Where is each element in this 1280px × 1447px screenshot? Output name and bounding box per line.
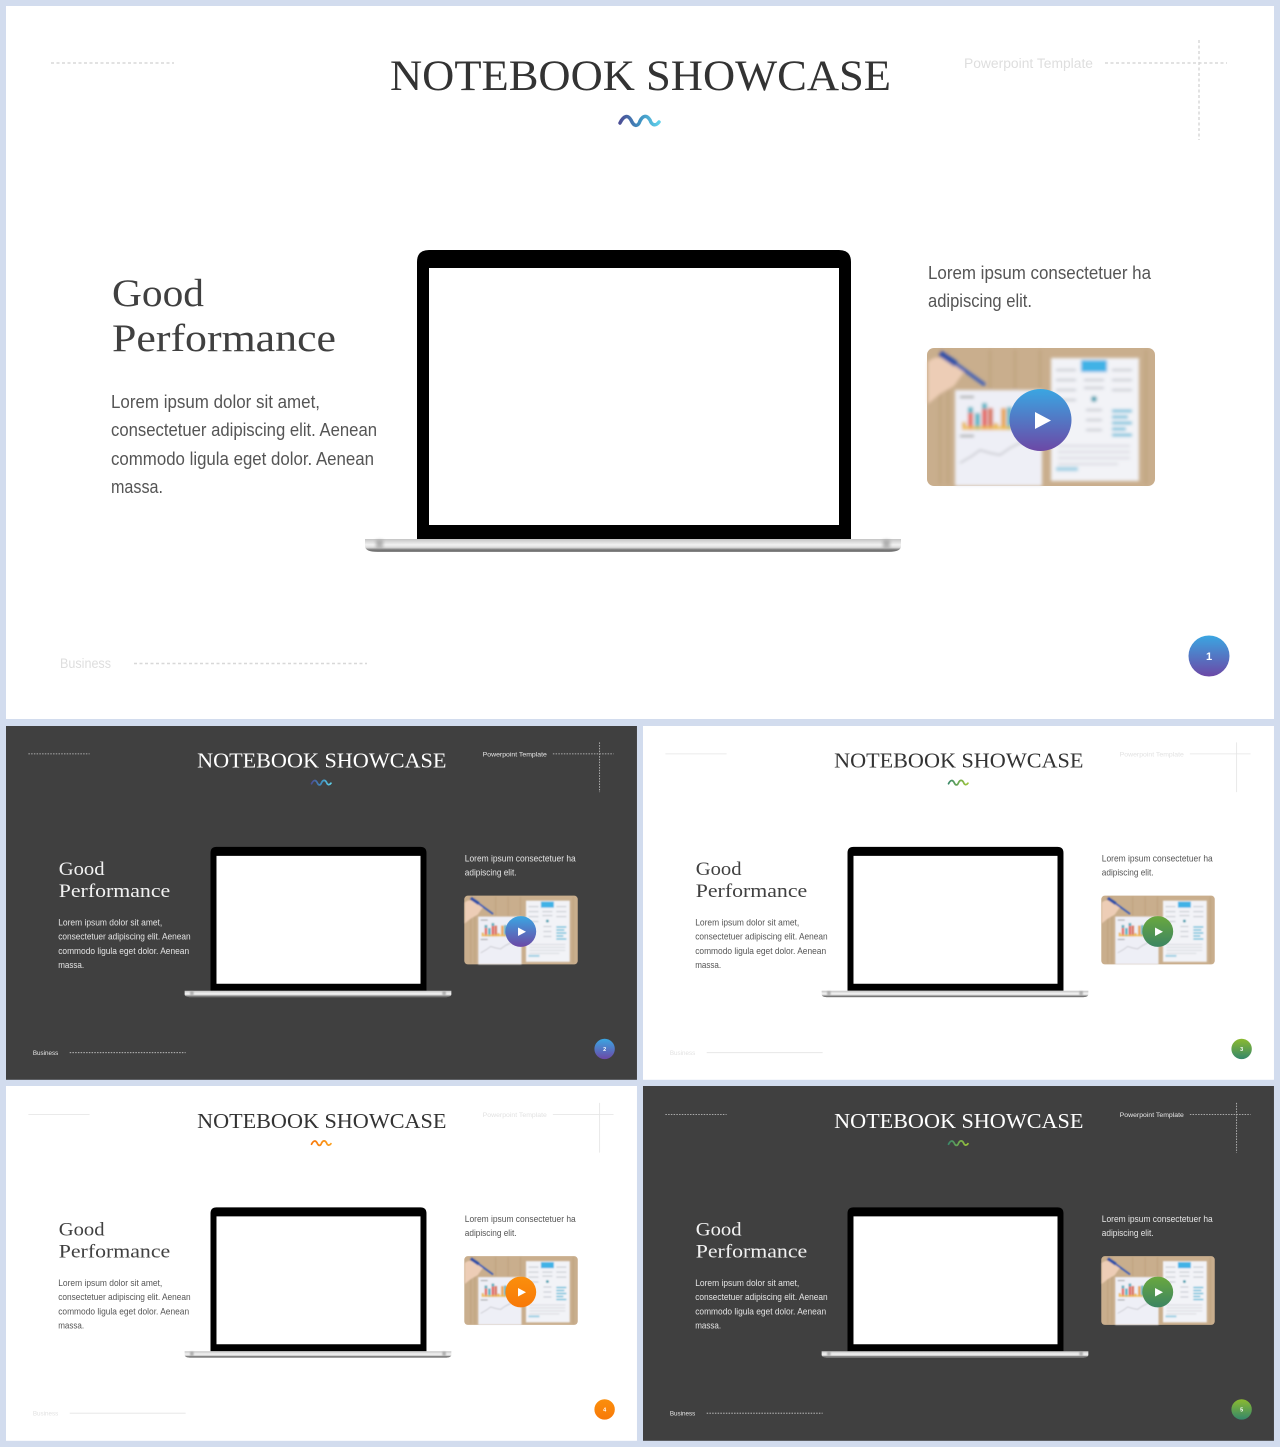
- title: NOTEBOOK SHOWCASE: [834, 748, 1083, 772]
- heading: Performance: Performance: [59, 881, 170, 902]
- footer label: Business: [33, 1410, 59, 1417]
- laptop: [185, 1207, 451, 1358]
- page number badge: 4: [603, 1407, 607, 1413]
- wave ornament: [949, 1141, 968, 1145]
- body text: consectetuer adipiscing elit. Aenean: [58, 1292, 191, 1302]
- heading: Performance: Performance: [696, 1242, 807, 1263]
- header crosshair rules: [553, 1103, 614, 1153]
- panel: slide 5 dark green: [643, 1086, 1274, 1441]
- body text: consectetuer adipiscing elit. Aenean: [111, 420, 377, 440]
- header left dashed rule: [28, 1113, 90, 1115]
- header label: Powerpoint Template: [964, 56, 1093, 71]
- body text: Lorem ipsum dolor sit amet,: [58, 1278, 162, 1288]
- wave ornament: [949, 780, 968, 785]
- play button: [1142, 916, 1173, 947]
- footer label: Business: [670, 1050, 696, 1057]
- page number badge: [1231, 1399, 1252, 1420]
- title: NOTEBOOK SHOWCASE: [390, 53, 891, 100]
- panel: slide 3 white green: [643, 726, 1274, 1080]
- side text: Lorem ipsum consectetuer ha: [465, 1214, 576, 1224]
- footer label: Business: [670, 1410, 696, 1417]
- header label: Powerpoint Template: [483, 751, 547, 758]
- page number badge: [594, 1039, 615, 1059]
- header crosshair rules: [1190, 742, 1251, 792]
- body text: commodo ligula eget dolor. Aenean: [695, 946, 826, 956]
- panel: slide 1 large white: [6, 6, 1274, 719]
- body text: commodo ligula eget dolor. Aenean: [695, 1306, 826, 1316]
- video thumbnail: [464, 896, 578, 964]
- heading: Performance: Performance: [696, 881, 807, 902]
- footer label: Business: [60, 656, 111, 671]
- body text: massa.: [695, 960, 721, 970]
- body text: commodo ligula eget dolor. Aenean: [111, 449, 374, 469]
- header label: Powerpoint Template: [1120, 1112, 1184, 1119]
- video thumbnail: [464, 1256, 578, 1325]
- page number badge: 3: [1240, 1047, 1243, 1053]
- side text: adipiscing elit.: [928, 291, 1032, 311]
- side text: Lorem ipsum consectetuer ha: [928, 263, 1152, 283]
- header left dashed rule: [51, 62, 174, 64]
- body text: Lorem ipsum dolor sit amet,: [695, 918, 799, 928]
- body text: massa.: [111, 477, 163, 497]
- side text: adipiscing elit.: [465, 867, 517, 877]
- heading: Good: Good: [696, 1219, 742, 1240]
- body text: Lorem ipsum dolor sit amet,: [695, 1278, 799, 1288]
- heading: Good: Good: [112, 272, 205, 315]
- page number badge: [1188, 636, 1230, 676]
- video thumbnail: [927, 348, 1155, 486]
- header left dashed rule: [665, 1113, 727, 1115]
- laptop: [822, 1207, 1088, 1358]
- page number badge: [1231, 1039, 1252, 1059]
- side text: adipiscing elit.: [1102, 867, 1154, 877]
- wave ornament: [620, 116, 659, 125]
- side text: adipiscing elit.: [1102, 1228, 1154, 1238]
- footer dashed rule: [70, 1412, 186, 1414]
- page number badge: 1: [1206, 651, 1212, 663]
- body text: consectetuer adipiscing elit. Aenean: [58, 931, 191, 941]
- body text: Lorem ipsum dolor sit amet,: [111, 392, 320, 412]
- page number badge: 2: [603, 1047, 606, 1053]
- side text: Lorem ipsum consectetuer ha: [465, 853, 576, 863]
- title: NOTEBOOK SHOWCASE: [834, 1109, 1083, 1133]
- laptop: [185, 847, 451, 997]
- video thumbnail: [1101, 1256, 1215, 1325]
- side text: Lorem ipsum consectetuer ha: [1102, 853, 1213, 863]
- laptop: [365, 250, 901, 552]
- header crosshair rules: [1190, 1103, 1251, 1153]
- body text: commodo ligula eget dolor. Aenean: [58, 1306, 189, 1316]
- heading: Good: Good: [696, 859, 742, 880]
- page number badge: [594, 1399, 615, 1420]
- header label: Powerpoint Template: [483, 1112, 547, 1119]
- heading: Good: Good: [59, 859, 105, 880]
- play button: [505, 916, 536, 947]
- title: NOTEBOOK SHOWCASE: [197, 1109, 446, 1133]
- header crosshair rules: [553, 742, 614, 792]
- side text: Lorem ipsum consectetuer ha: [1102, 1214, 1213, 1224]
- body text: massa.: [58, 1320, 84, 1330]
- wave ornament: [312, 1141, 331, 1145]
- footer dashed rule: [707, 1412, 823, 1414]
- play button: [1142, 1277, 1173, 1307]
- header left dashed rule: [28, 753, 90, 755]
- body text: massa.: [695, 1320, 721, 1330]
- page number badge: 5: [1240, 1407, 1243, 1413]
- title: NOTEBOOK SHOWCASE: [197, 748, 446, 772]
- header left dashed rule: [665, 753, 727, 755]
- video thumbnail: [1101, 896, 1215, 964]
- laptop: [822, 847, 1088, 997]
- body text: commodo ligula eget dolor. Aenean: [58, 946, 189, 956]
- footer dashed rule: [134, 662, 367, 664]
- header crosshair rules: [1105, 40, 1227, 140]
- play button: [1010, 389, 1072, 451]
- side text: adipiscing elit.: [465, 1228, 517, 1238]
- footer dashed rule: [70, 1052, 186, 1054]
- heading: Performance: Performance: [112, 317, 336, 360]
- body text: consectetuer adipiscing elit. Aenean: [695, 1292, 828, 1302]
- footer label: Business: [33, 1050, 59, 1057]
- body text: consectetuer adipiscing elit. Aenean: [695, 931, 828, 941]
- panel: slide 2 dark: [6, 726, 637, 1080]
- panel: slide 4 white orange: [6, 1086, 637, 1441]
- header label: Powerpoint Template: [1120, 751, 1184, 758]
- footer dashed rule: [707, 1052, 823, 1054]
- wave ornament: [312, 780, 331, 785]
- body text: massa.: [58, 960, 84, 970]
- heading: Performance: Performance: [59, 1242, 170, 1263]
- play button: [505, 1277, 536, 1307]
- heading: Good: Good: [59, 1219, 105, 1240]
- body text: Lorem ipsum dolor sit amet,: [58, 918, 162, 928]
